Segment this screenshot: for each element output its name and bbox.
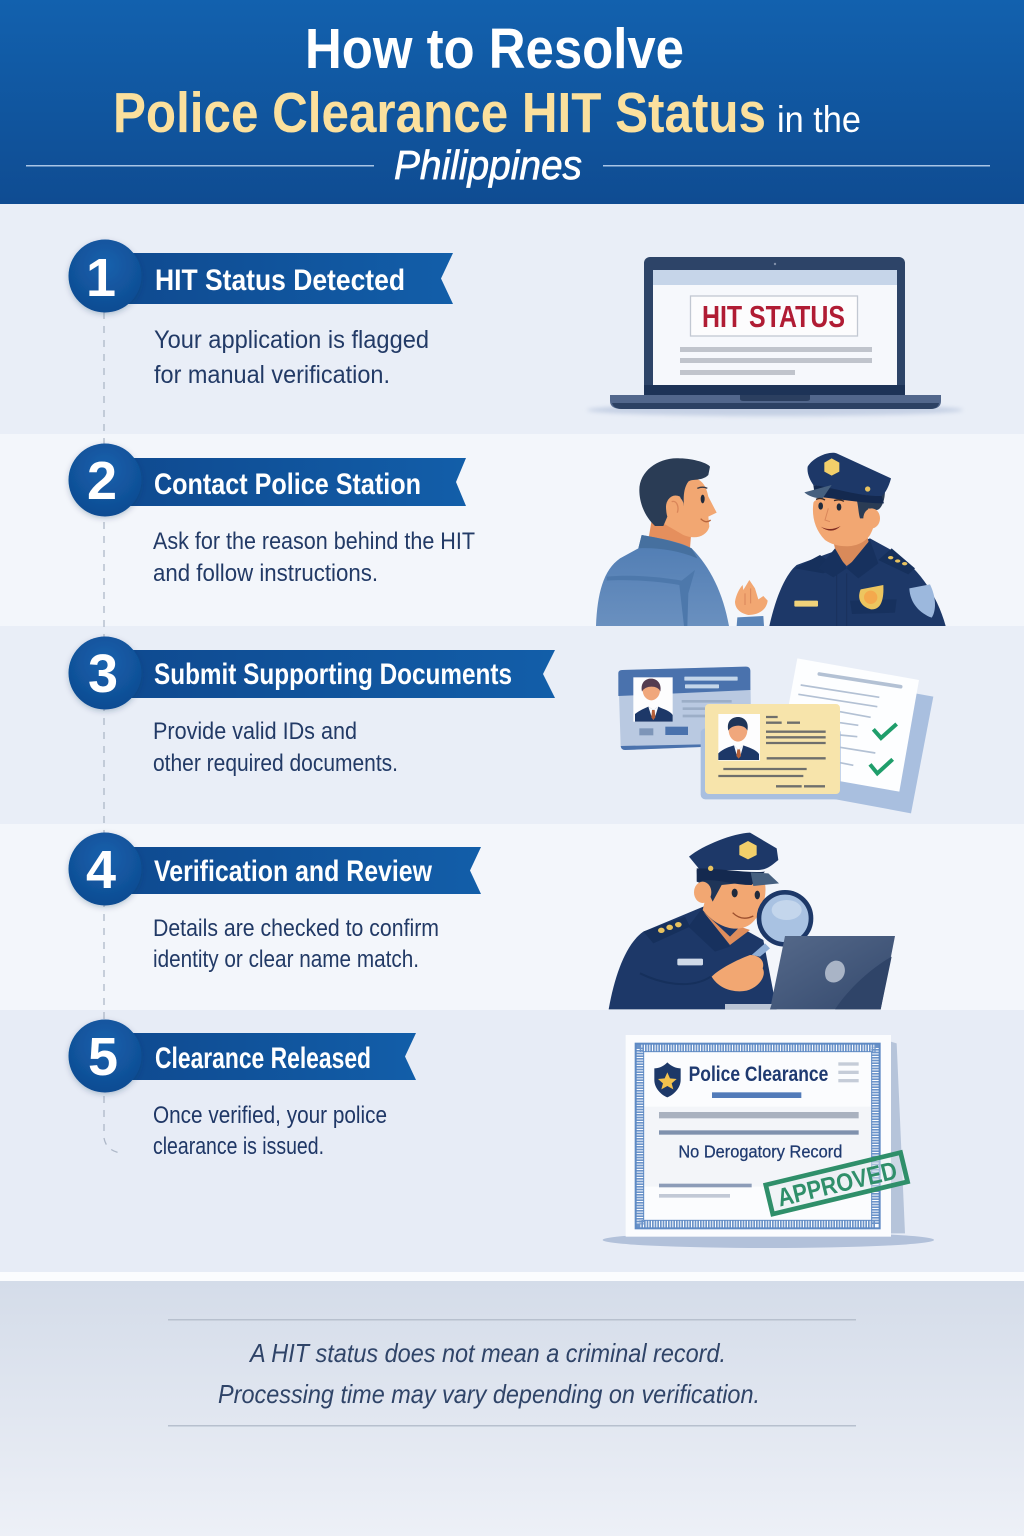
step 5 <box>68 1020 416 1160</box>
page background bands <box>0 204 1024 1281</box>
yellow ID card <box>701 704 841 799</box>
illustration: applicant talking to officer <box>596 453 946 626</box>
header rule left <box>26 165 374 166</box>
numeral 2: 2 <box>87 451 117 511</box>
numeral 3: 3 <box>88 644 118 704</box>
description 2: and follow instructions. <box>153 560 378 587</box>
description 3: other required documents. <box>153 750 398 777</box>
numeral 1: 1 <box>86 248 116 308</box>
blue ID card <box>618 667 751 750</box>
heading 2: Contact Police Station <box>154 468 421 501</box>
laptop <box>725 936 895 1009</box>
cap visor <box>751 872 779 886</box>
description 4: identity or clear name match. <box>153 946 419 973</box>
step 3 <box>68 636 555 777</box>
officer hand <box>712 955 764 991</box>
illustration: police clearance certificate <box>603 1035 934 1248</box>
step 4 <box>68 832 481 973</box>
header rule right <box>603 165 990 166</box>
number badge 1 <box>68 240 142 312</box>
approved stamp: APPROVED <box>775 1157 900 1212</box>
certificate shadow <box>603 1232 934 1248</box>
back sheet <box>803 677 933 813</box>
ribbon 4 <box>120 847 481 894</box>
rank dots <box>658 922 682 933</box>
footer rule bottom <box>168 1425 856 1426</box>
number badge 4 <box>68 832 142 906</box>
footer note panel <box>0 1281 1024 1536</box>
footer rule top <box>168 1319 856 1320</box>
footer note text: Processing time may vary depending on verification. <box>218 1379 760 1409</box>
certificate border <box>640 1048 876 1224</box>
number badge 5 <box>68 1020 142 1092</box>
footer note text: A HIT status does not mean a criminal record. <box>248 1338 726 1368</box>
number badge 2 <box>68 444 142 516</box>
epaulette <box>643 917 690 943</box>
officer neck <box>703 912 750 945</box>
checklist sheet <box>777 658 919 792</box>
dashed timeline connector <box>104 312 120 1153</box>
description 1: Your application is flagged <box>154 326 429 354</box>
name plate <box>677 959 703 965</box>
officer face <box>703 873 766 929</box>
cap band <box>697 868 765 885</box>
officer hair <box>697 870 737 902</box>
ribbon 3 <box>120 650 555 698</box>
officer smile <box>733 913 753 918</box>
check mark bottom <box>870 759 893 773</box>
officer collar <box>688 907 730 952</box>
title line 2 highlighted: Police Clearance HIT Status <box>113 81 766 145</box>
cap button <box>708 866 713 871</box>
applicant <box>596 458 768 626</box>
description 1: for manual verification. <box>154 361 390 389</box>
No Derogatory Record: No Derogatory Record <box>678 1142 842 1162</box>
cap badge <box>739 841 757 859</box>
ribbon 1 <box>120 253 453 304</box>
ribbon 5 <box>120 1033 416 1080</box>
officer ear <box>694 882 711 903</box>
magnifier <box>752 892 811 957</box>
heading 3: Submit Supporting Documents <box>154 658 512 691</box>
shield icon <box>654 1062 681 1097</box>
numeral 4: 4 <box>86 840 116 900</box>
illustration: IDs and documents <box>618 658 933 813</box>
description 3: Provide valid IDs and <box>153 718 357 745</box>
HIT STATUS label: HIT STATUS <box>702 299 845 334</box>
Police Clearance title: Police Clearance <box>689 1062 828 1086</box>
number badge 3 <box>68 636 142 710</box>
officer sleeve line <box>640 973 711 984</box>
description 2: Ask for the reason behind the HIT <box>153 528 475 555</box>
police officer <box>769 453 946 626</box>
heading 5: Clearance Released <box>155 1042 371 1075</box>
title line 1: How to Resolve <box>305 17 684 81</box>
certificate sheet <box>626 1035 891 1237</box>
description 5: Once verified, your police <box>153 1102 387 1129</box>
step 2 <box>68 444 475 587</box>
numeral 5: 5 <box>88 1027 118 1087</box>
illustration: laptop with HIT status <box>587 257 963 416</box>
officer cap <box>689 833 778 870</box>
check mark top <box>873 724 897 738</box>
illustration: officer reviewing with magnifier and laptop <box>609 833 895 1009</box>
officer eyes <box>732 889 760 899</box>
heading 4: Verification and Review <box>154 855 433 888</box>
description 4: Details are checked to confirm <box>153 915 439 942</box>
heading 1: HIT Status Detected <box>155 264 405 297</box>
ribbon 2 <box>120 458 466 506</box>
step 1 <box>68 240 453 389</box>
title in the: in the <box>777 99 861 140</box>
description 5: clearance is issued. <box>153 1133 324 1160</box>
officer body <box>609 907 777 1009</box>
title Philippines: Philippines <box>394 142 582 188</box>
header banner <box>0 0 1024 204</box>
